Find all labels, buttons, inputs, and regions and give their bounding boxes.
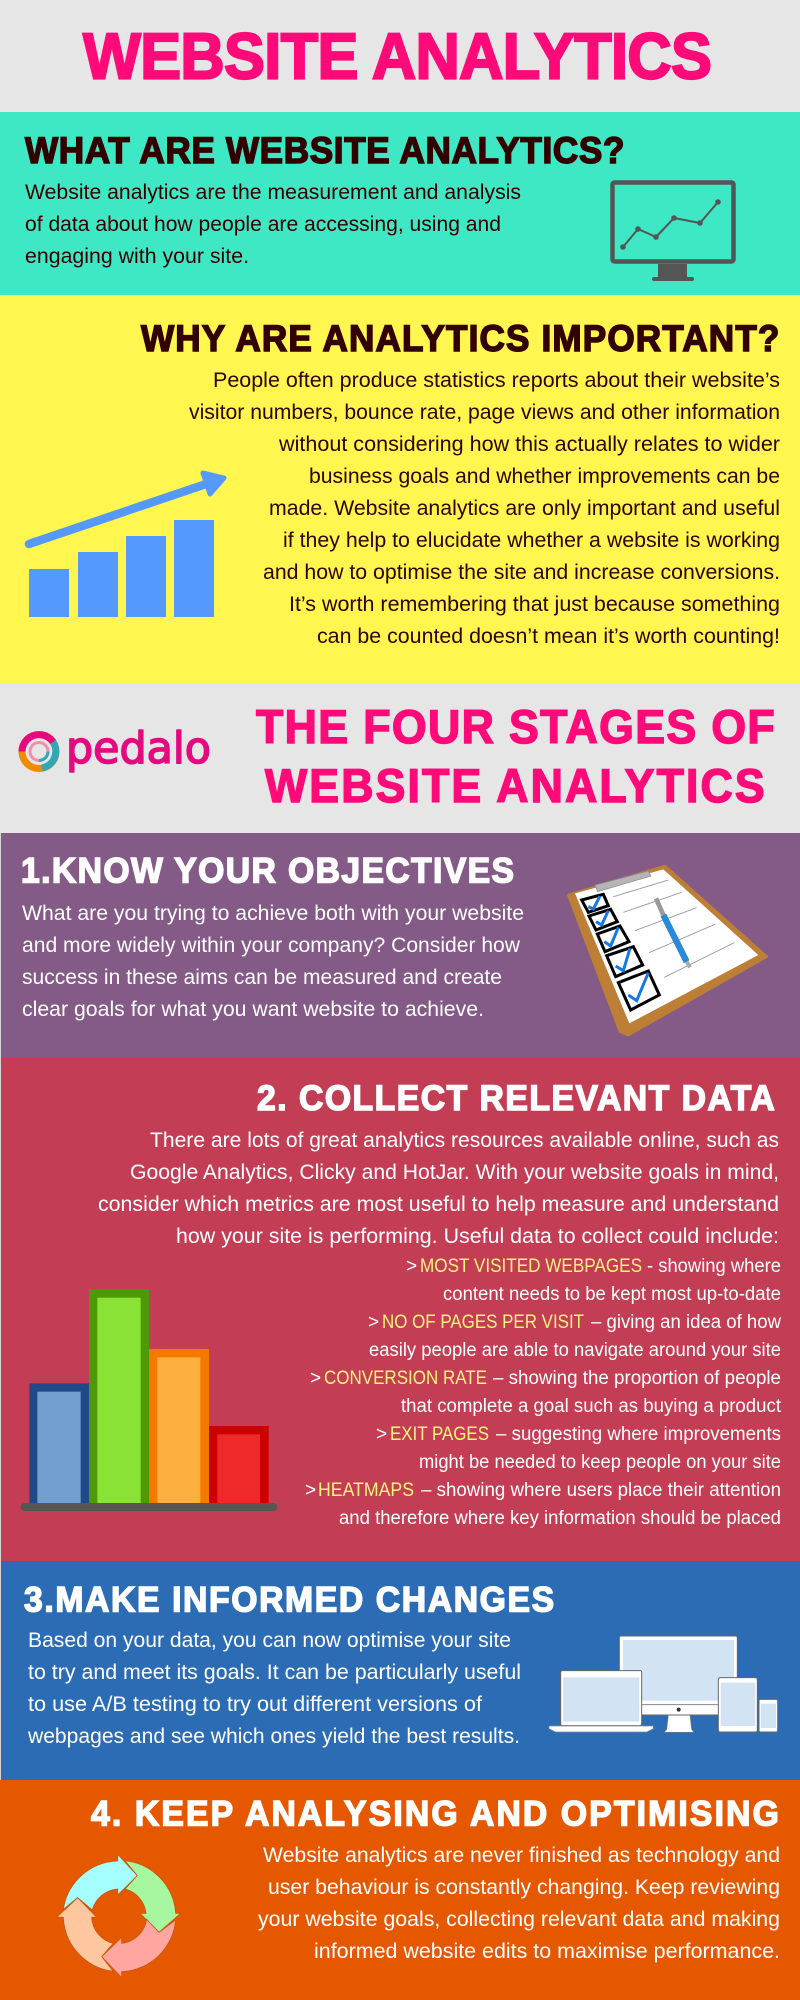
heading: four stages: THE FOUR STAGES OF: [256, 701, 775, 753]
icon: responsive devices: [549, 1636, 778, 1732]
text block: stage 1: What are you trying to achieve both with your website: [22, 902, 524, 925]
text block: stage 1: success in these aims can be measured and create: [22, 966, 502, 989]
text block: stage 1: and more widely within your company? Consider how: [22, 934, 521, 957]
list: useful data: – suggesting where improvements: [496, 1424, 781, 1445]
heading: stage 3: 3.MAKE INFORMED CHANGES: [24, 1581, 554, 1620]
text block: stage 2 intro: consider which metrics are most useful to help measure and understand: [98, 1193, 779, 1216]
text block: why important: made. Website analytics are only important and useful: [269, 497, 780, 520]
heading: why are analytics important: WHY ARE ANALYTICS IMPORTANT?: [141, 317, 779, 359]
text block: why important: without considering how this actually relates to wider: [278, 433, 780, 456]
panel: stage 1 know your objectives: [0, 833, 800, 1058]
text block: stage 2 intro: [98, 1129, 779, 1248]
text block: why important: It’s worth remembering that just because something: [289, 593, 780, 616]
logo: pedalo: pedalo: [66, 723, 211, 774]
text block: stage 3: to use A/B testing to try out different versions of: [28, 1693, 482, 1716]
heading: stage 2: 2. COLLECT RELEVANT DATA: [257, 1079, 775, 1118]
list: useful data: easily people are able to navigate around your site: [369, 1340, 781, 1361]
text block: definition: engaging with your site.: [25, 245, 249, 268]
text block: why important: business goals and whether improvements can be: [309, 465, 780, 488]
list: useful data: [305, 1256, 782, 1529]
text block: stage 3: to try and meet its goals. It can be particularly useful: [28, 1661, 521, 1684]
text block: why important: if they help to elucidate whether a website is working: [283, 529, 780, 552]
text block: why important: People often produce statistics reports about their website’s: [213, 369, 780, 392]
title: WEBSITE ANALYTICS: [83, 21, 712, 93]
heading: four stages: WEBSITE ANALYTICS: [265, 760, 765, 812]
list: useful data: – showing the proportion of people: [493, 1368, 781, 1389]
icon: monitor with line chart: [612, 182, 734, 281]
text block: why important: [189, 369, 780, 648]
list: useful data: >: [368, 1312, 379, 1333]
text block: why important: visitor numbers, bounce rate, page views and other information: [189, 401, 780, 424]
text block: stage 4: user behaviour is constantly changing. Keep reviewing: [268, 1876, 780, 1899]
list: useful data: MOST VISITED WEBPAGES: [420, 1256, 642, 1277]
text block: why important: can be counted doesn’t mean it’s worth counting!: [317, 625, 780, 648]
text block: stage 3: Based on your data, you can now optimise your site: [28, 1629, 511, 1652]
list: useful data: CONVERSION RATE: [324, 1368, 487, 1389]
text block: definition: Website analytics are the measurement and analysis: [25, 181, 521, 204]
text block: stage 1: [22, 902, 524, 1021]
text block: definition: [25, 181, 521, 268]
text block: stage 2 intro: Google Analytics, Clicky and HotJar. With your website goals in mind,: [130, 1161, 779, 1184]
list: useful data: >: [305, 1480, 316, 1501]
list: useful data: HEATMAPS: [318, 1480, 414, 1501]
heading: stage 4: 4. KEEP ANALYSING AND OPTIMISING: [91, 1795, 779, 1834]
list: useful data: NO OF PAGES PER VISIT: [382, 1312, 584, 1333]
text block: stage 4: your website goals, collecting relevant data and making: [258, 1908, 780, 1931]
heading: what are website analytics: WHAT ARE WEBSITE ANALYTICS?: [25, 129, 624, 171]
text block: stage 2 intro: how your site is performing. Useful data to collect could include:: [176, 1225, 779, 1248]
heading: stage 1: 1.KNOW YOUR OBJECTIVES: [21, 852, 514, 891]
panel: four stages banner: [0, 683, 800, 833]
list: useful data: - showing where: [647, 1256, 781, 1277]
list: useful data: – giving an idea of how: [591, 1312, 781, 1333]
panel: stage 4 keep analysing and optimising: [0, 1780, 800, 2000]
panel: stage 3 make informed changes: [0, 1561, 800, 1780]
list: useful data: that complete a goal such as buying a product: [401, 1396, 782, 1417]
panel: what are website analytics: [0, 112, 800, 295]
text block: stage 4: [258, 1844, 780, 1963]
list: useful data: >: [376, 1424, 387, 1445]
panel: title band: [0, 0, 800, 112]
text block: definition: of data about how people are accessing, using and: [25, 213, 501, 236]
list: useful data: EXIT PAGES: [390, 1424, 489, 1445]
list: useful data: might be needed to keep people on your site: [419, 1452, 781, 1473]
panel: stage 2 collect relevant data: [0, 1058, 800, 1561]
text block: stage 4: Website analytics are never finished as technology and: [263, 1844, 780, 1867]
text block: stage 2 intro: There are lots of great analytics resources available online, such as: [150, 1129, 779, 1152]
panel: why are analytics important: [0, 295, 800, 683]
list: useful data: – showing where users place their attention: [421, 1480, 781, 1501]
list: useful data: >: [310, 1368, 321, 1389]
icon: cycle arrows: [57, 1854, 181, 1978]
list: useful data: and therefore where key information should be placed: [339, 1508, 781, 1529]
text block: stage 4: informed website edits to maximise performance.: [314, 1940, 780, 1963]
text block: stage 1: clear goals for what you want website to achieve.: [22, 998, 484, 1021]
bar chart icon: [21, 1289, 277, 1511]
icon: clipboard checklist: [568, 866, 767, 1035]
list: useful data: content needs to be kept most up-to-date: [443, 1284, 781, 1305]
list: useful data: >: [406, 1256, 417, 1277]
text block: stage 3: [27, 1629, 521, 1748]
text block: stage 3: webpages and see which ones yield the best results.: [27, 1725, 520, 1748]
text block: why important: and how to optimise the site and increase conversions.: [263, 561, 780, 584]
heading: four stages: [256, 701, 775, 812]
chart icon: rising bars with arrow: [29, 473, 224, 617]
